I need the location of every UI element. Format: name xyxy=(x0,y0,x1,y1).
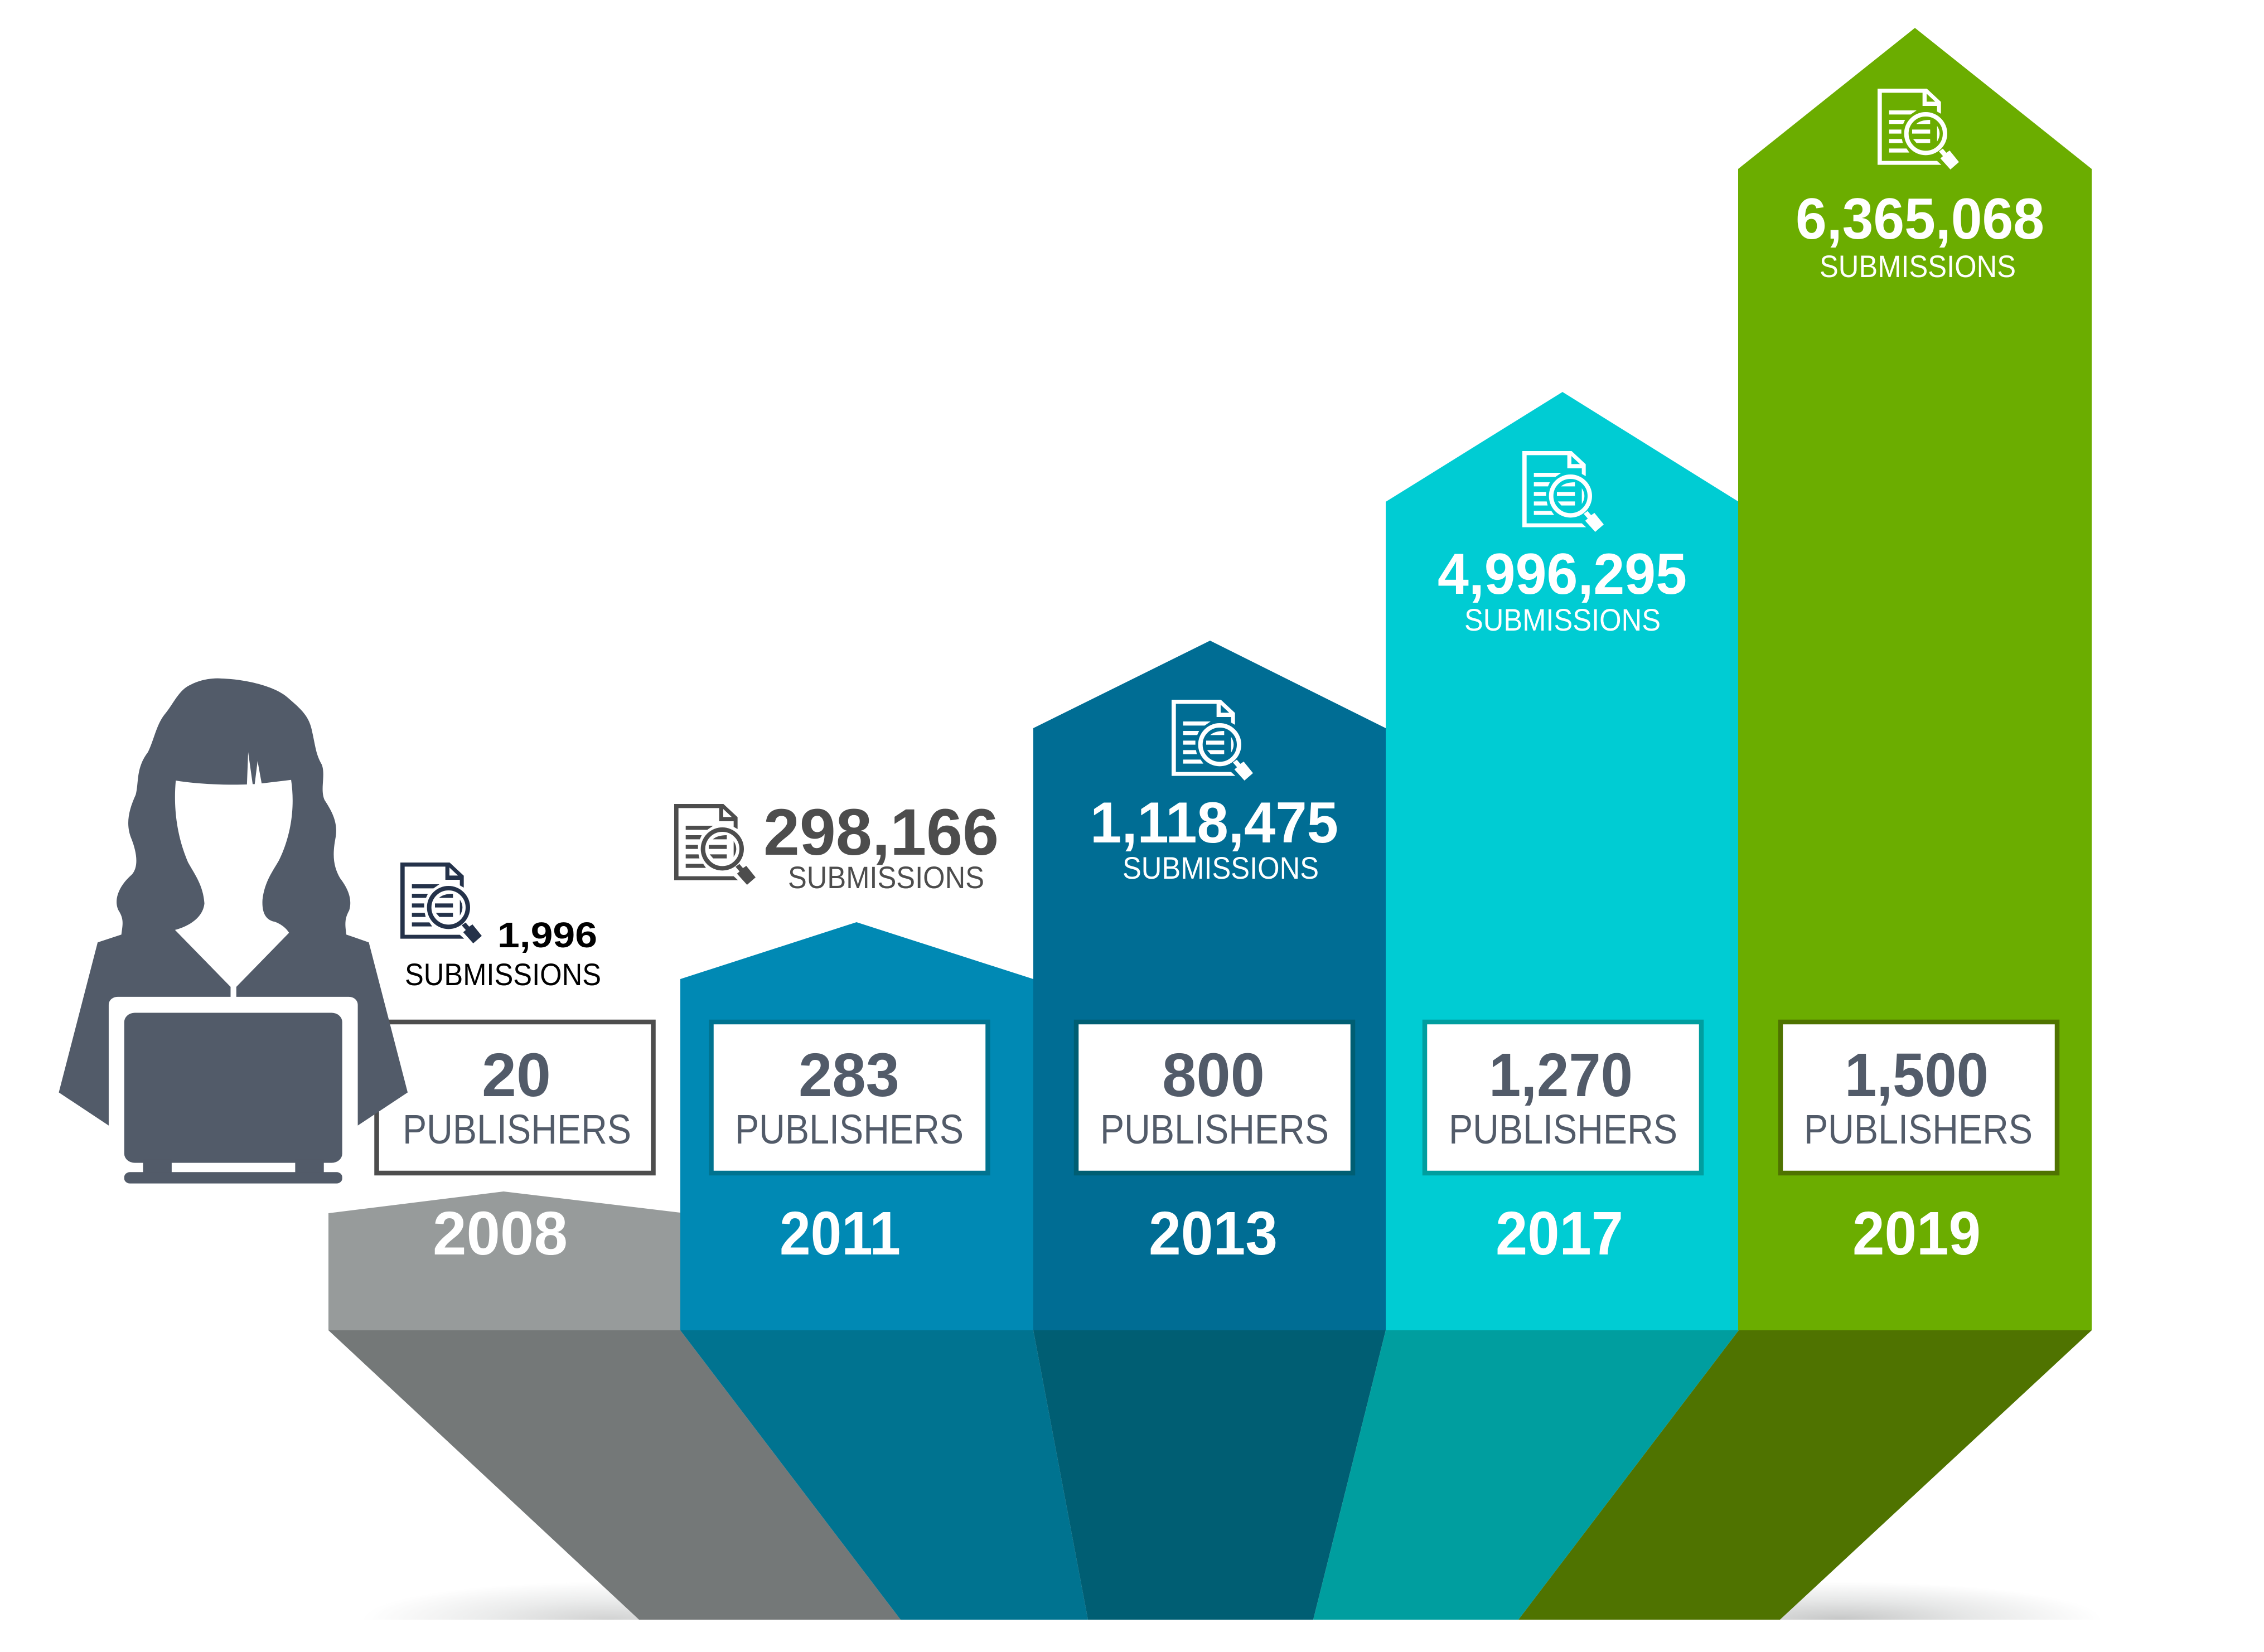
face and neck cutout xyxy=(175,752,293,999)
icon: document search xyxy=(1172,700,1253,781)
year 2011: 2011 xyxy=(780,1199,901,1268)
publishers count 1,270: 1,270 xyxy=(1489,1041,1633,1110)
publishers box 2017 xyxy=(1425,1022,1701,1173)
submissions label: SUBMISSIONS xyxy=(405,957,601,992)
publishers count 1,500: 1,500 xyxy=(1845,1041,1989,1110)
publishers box 2019 xyxy=(1781,1022,2057,1173)
submissions label: SUBMISSIONS xyxy=(1123,850,1319,885)
floor shadow right xyxy=(1578,1582,2102,1652)
laptop frame xyxy=(109,997,358,1167)
year 2017: 2017 xyxy=(1496,1199,1623,1268)
hair and body silhouette xyxy=(59,679,408,1126)
column 2008 xyxy=(328,1191,901,1620)
publishers box 2013 xyxy=(1076,1022,1353,1173)
submissions 2013 xyxy=(1090,700,1338,885)
publishers box 2008 xyxy=(377,1022,654,1173)
submissions 2008 xyxy=(400,863,601,992)
publishers label: PUBLISHERS xyxy=(735,1106,964,1152)
publishers label: PUBLISHERS xyxy=(1100,1106,1329,1152)
publishers label: PUBLISHERS xyxy=(403,1106,631,1152)
publishers box 2011 xyxy=(712,1022,988,1173)
icon: document search xyxy=(400,863,482,943)
submissions count: 6,365,068 xyxy=(1796,187,2044,251)
column 2011 xyxy=(680,922,1088,1620)
submissions 2017 xyxy=(1438,451,1687,637)
column 2019 xyxy=(1518,28,2092,1620)
icon: document search xyxy=(674,804,756,885)
year 2008: 2008 xyxy=(433,1199,568,1268)
submissions count: 1,118,475 xyxy=(1090,791,1338,855)
submissions label: SUBMISSIONS xyxy=(1820,249,2016,284)
laptop foot left xyxy=(143,1159,172,1174)
publishers count 20: 20 xyxy=(482,1041,551,1110)
publishers label: PUBLISHERS xyxy=(1449,1106,1677,1152)
column 2013 xyxy=(1033,641,1386,1620)
submissions count: 4,996,295 xyxy=(1438,542,1687,607)
year 2019: 2019 xyxy=(1852,1199,1981,1268)
publishers count 283: 283 xyxy=(799,1041,899,1110)
floor shadow left xyxy=(362,1582,853,1652)
submissions count: 1,996 xyxy=(497,915,597,955)
laptop screen xyxy=(124,1013,342,1163)
submissions label: SUBMISSIONS xyxy=(788,860,984,895)
laptop foot right xyxy=(295,1159,324,1174)
laptop base xyxy=(124,1172,342,1184)
column 2017 xyxy=(1313,392,1739,1620)
icon: document search xyxy=(1878,89,1959,169)
year 2013: 2013 xyxy=(1149,1199,1278,1268)
submissions count: 298,166 xyxy=(763,796,999,869)
publishers label: PUBLISHERS xyxy=(1804,1106,2033,1152)
submissions 2019 xyxy=(1796,89,2044,284)
person with laptop icon xyxy=(59,679,408,1184)
submissions 2011 xyxy=(674,796,999,895)
publishers count 800: 800 xyxy=(1162,1041,1265,1110)
submissions label: SUBMISSIONS xyxy=(1464,602,1661,637)
icon: document search xyxy=(1522,451,1604,532)
